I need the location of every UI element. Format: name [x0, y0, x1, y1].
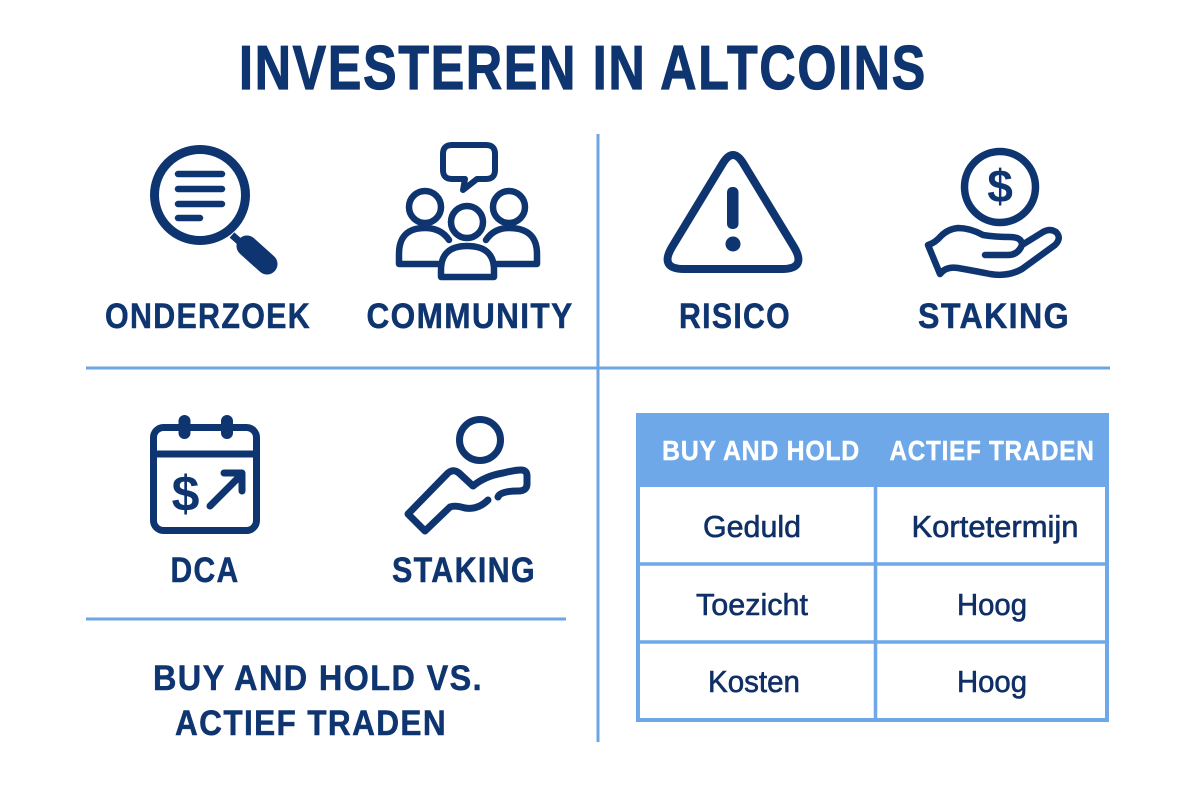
icon: person with hand — [408, 420, 527, 531]
comparison table — [636, 413, 1109, 720]
label: community: COMMUNITY — [366, 297, 574, 336]
comparison table: BUY AND HOLD — [662, 435, 860, 466]
label: onderzoek: ONDERZOEK — [105, 297, 311, 336]
comparison table: Kosten — [708, 664, 800, 699]
icon: magnifying glass — [154, 150, 267, 264]
comparison table: Toezicht — [696, 587, 808, 622]
comparison table: Geduld — [703, 509, 801, 544]
icon: calendar: $ — [172, 466, 200, 522]
icon: coin in hand — [928, 152, 1059, 275]
icon: warning triangle — [668, 155, 798, 269]
comparison table: Hoog — [957, 587, 1027, 622]
label: staking 1: STAKING — [918, 297, 1070, 336]
subheading — [153, 659, 483, 743]
icon: calendar — [154, 421, 256, 530]
subheading: BUY AND HOLD VS. — [153, 659, 483, 698]
comparison table: Hoog — [957, 664, 1027, 699]
comparison table: Kortetermijn — [912, 509, 1078, 544]
icon: community — [399, 145, 537, 277]
table header — [636, 413, 1109, 487]
title: INVESTEREN IN ALTCOINS — [239, 34, 927, 103]
icon: coin in hand: $ — [987, 160, 1013, 212]
label: dca: DCA — [170, 551, 240, 590]
label: staking 2: STAKING — [392, 551, 536, 590]
label: risico: RISICO — [679, 297, 791, 336]
subheading: ACTIEF TRADEN — [175, 704, 447, 743]
comparison table: ACTIEF TRADEN — [890, 435, 1094, 466]
